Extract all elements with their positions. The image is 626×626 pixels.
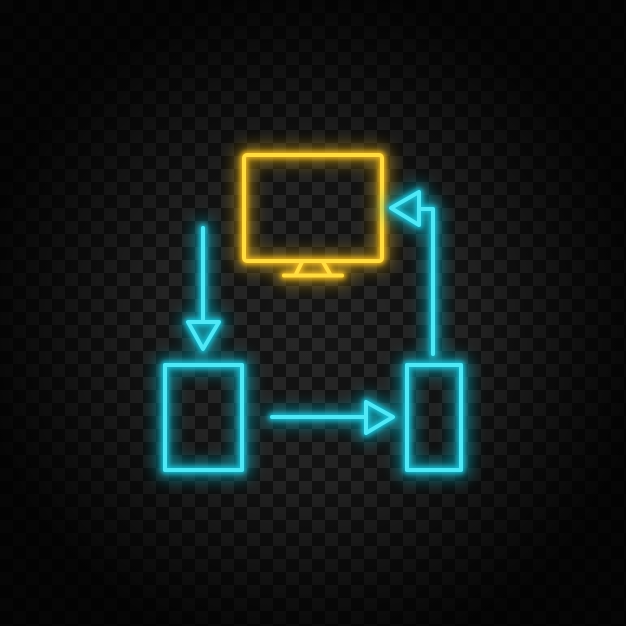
icon: monitor xyxy=(244,155,382,276)
neon flow shapes: tablet, phone and arrows xyxy=(165,192,461,470)
